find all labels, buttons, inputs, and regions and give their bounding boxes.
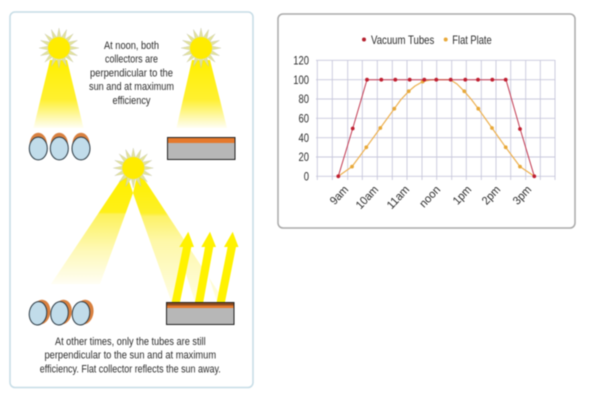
noon tubes xyxy=(29,133,90,160)
y axis labels: 80 xyxy=(298,92,309,106)
panel: collectors diagram xyxy=(10,12,253,388)
text: noon caption: perpendicular to the xyxy=(90,67,173,79)
text: other times caption: perpendicular to the sun and at maximum xyxy=(44,350,216,362)
legend xyxy=(362,33,492,47)
y axis labels: 120 xyxy=(293,54,309,68)
icon: sun centre xyxy=(113,148,153,188)
text: other times caption xyxy=(40,336,221,375)
y axis labels: 20 xyxy=(298,150,309,164)
legend: Vacuum Tubes xyxy=(371,33,434,47)
text: noon caption: At noon, both xyxy=(104,40,159,52)
chart grid xyxy=(316,60,555,180)
text: noon caption: sun and at maximum xyxy=(89,81,174,93)
y axis labels: 0 xyxy=(304,170,309,184)
x axis labels: 2pm xyxy=(480,184,503,207)
y axis labels: 40 xyxy=(298,131,309,145)
beam: lower left xyxy=(51,172,133,284)
x axis labels: 11am xyxy=(385,184,412,212)
x axis labels: 10am xyxy=(354,184,381,212)
x axis labels: 3pm xyxy=(511,184,534,207)
beam: right noon xyxy=(176,60,227,128)
icon: sun right xyxy=(181,28,221,68)
series: vacuum tubes xyxy=(336,78,536,178)
icon: sun left xyxy=(39,28,79,68)
lower tubes xyxy=(28,299,95,326)
legend: Flat Plate xyxy=(452,33,492,47)
y axis labels: 60 xyxy=(298,112,309,126)
y axis labels xyxy=(293,54,309,184)
x axis labels: 9am xyxy=(328,184,351,207)
text: other times caption: efficiency. Flat collector reflects the sun away. xyxy=(40,363,221,375)
beam: lower right xyxy=(133,172,225,302)
panel: line chart xyxy=(278,14,575,228)
x axis labels: noon xyxy=(417,184,443,210)
reflected arrows xyxy=(172,232,238,302)
text: noon caption xyxy=(89,40,174,107)
x axis labels xyxy=(328,184,534,212)
x axis labels: 1pm xyxy=(451,184,474,207)
text: noon caption: collectors are xyxy=(105,54,158,66)
lower flat plate xyxy=(166,302,234,324)
beam gaps beside arrows xyxy=(179,268,217,302)
text: other times caption: At other times, only the tubes are still xyxy=(55,336,206,348)
noon flat plate xyxy=(168,138,235,160)
series: flat plate xyxy=(338,80,534,176)
y axis labels: 100 xyxy=(293,73,309,87)
text: noon caption: efficiency xyxy=(112,95,151,107)
beam: left noon xyxy=(34,60,84,128)
